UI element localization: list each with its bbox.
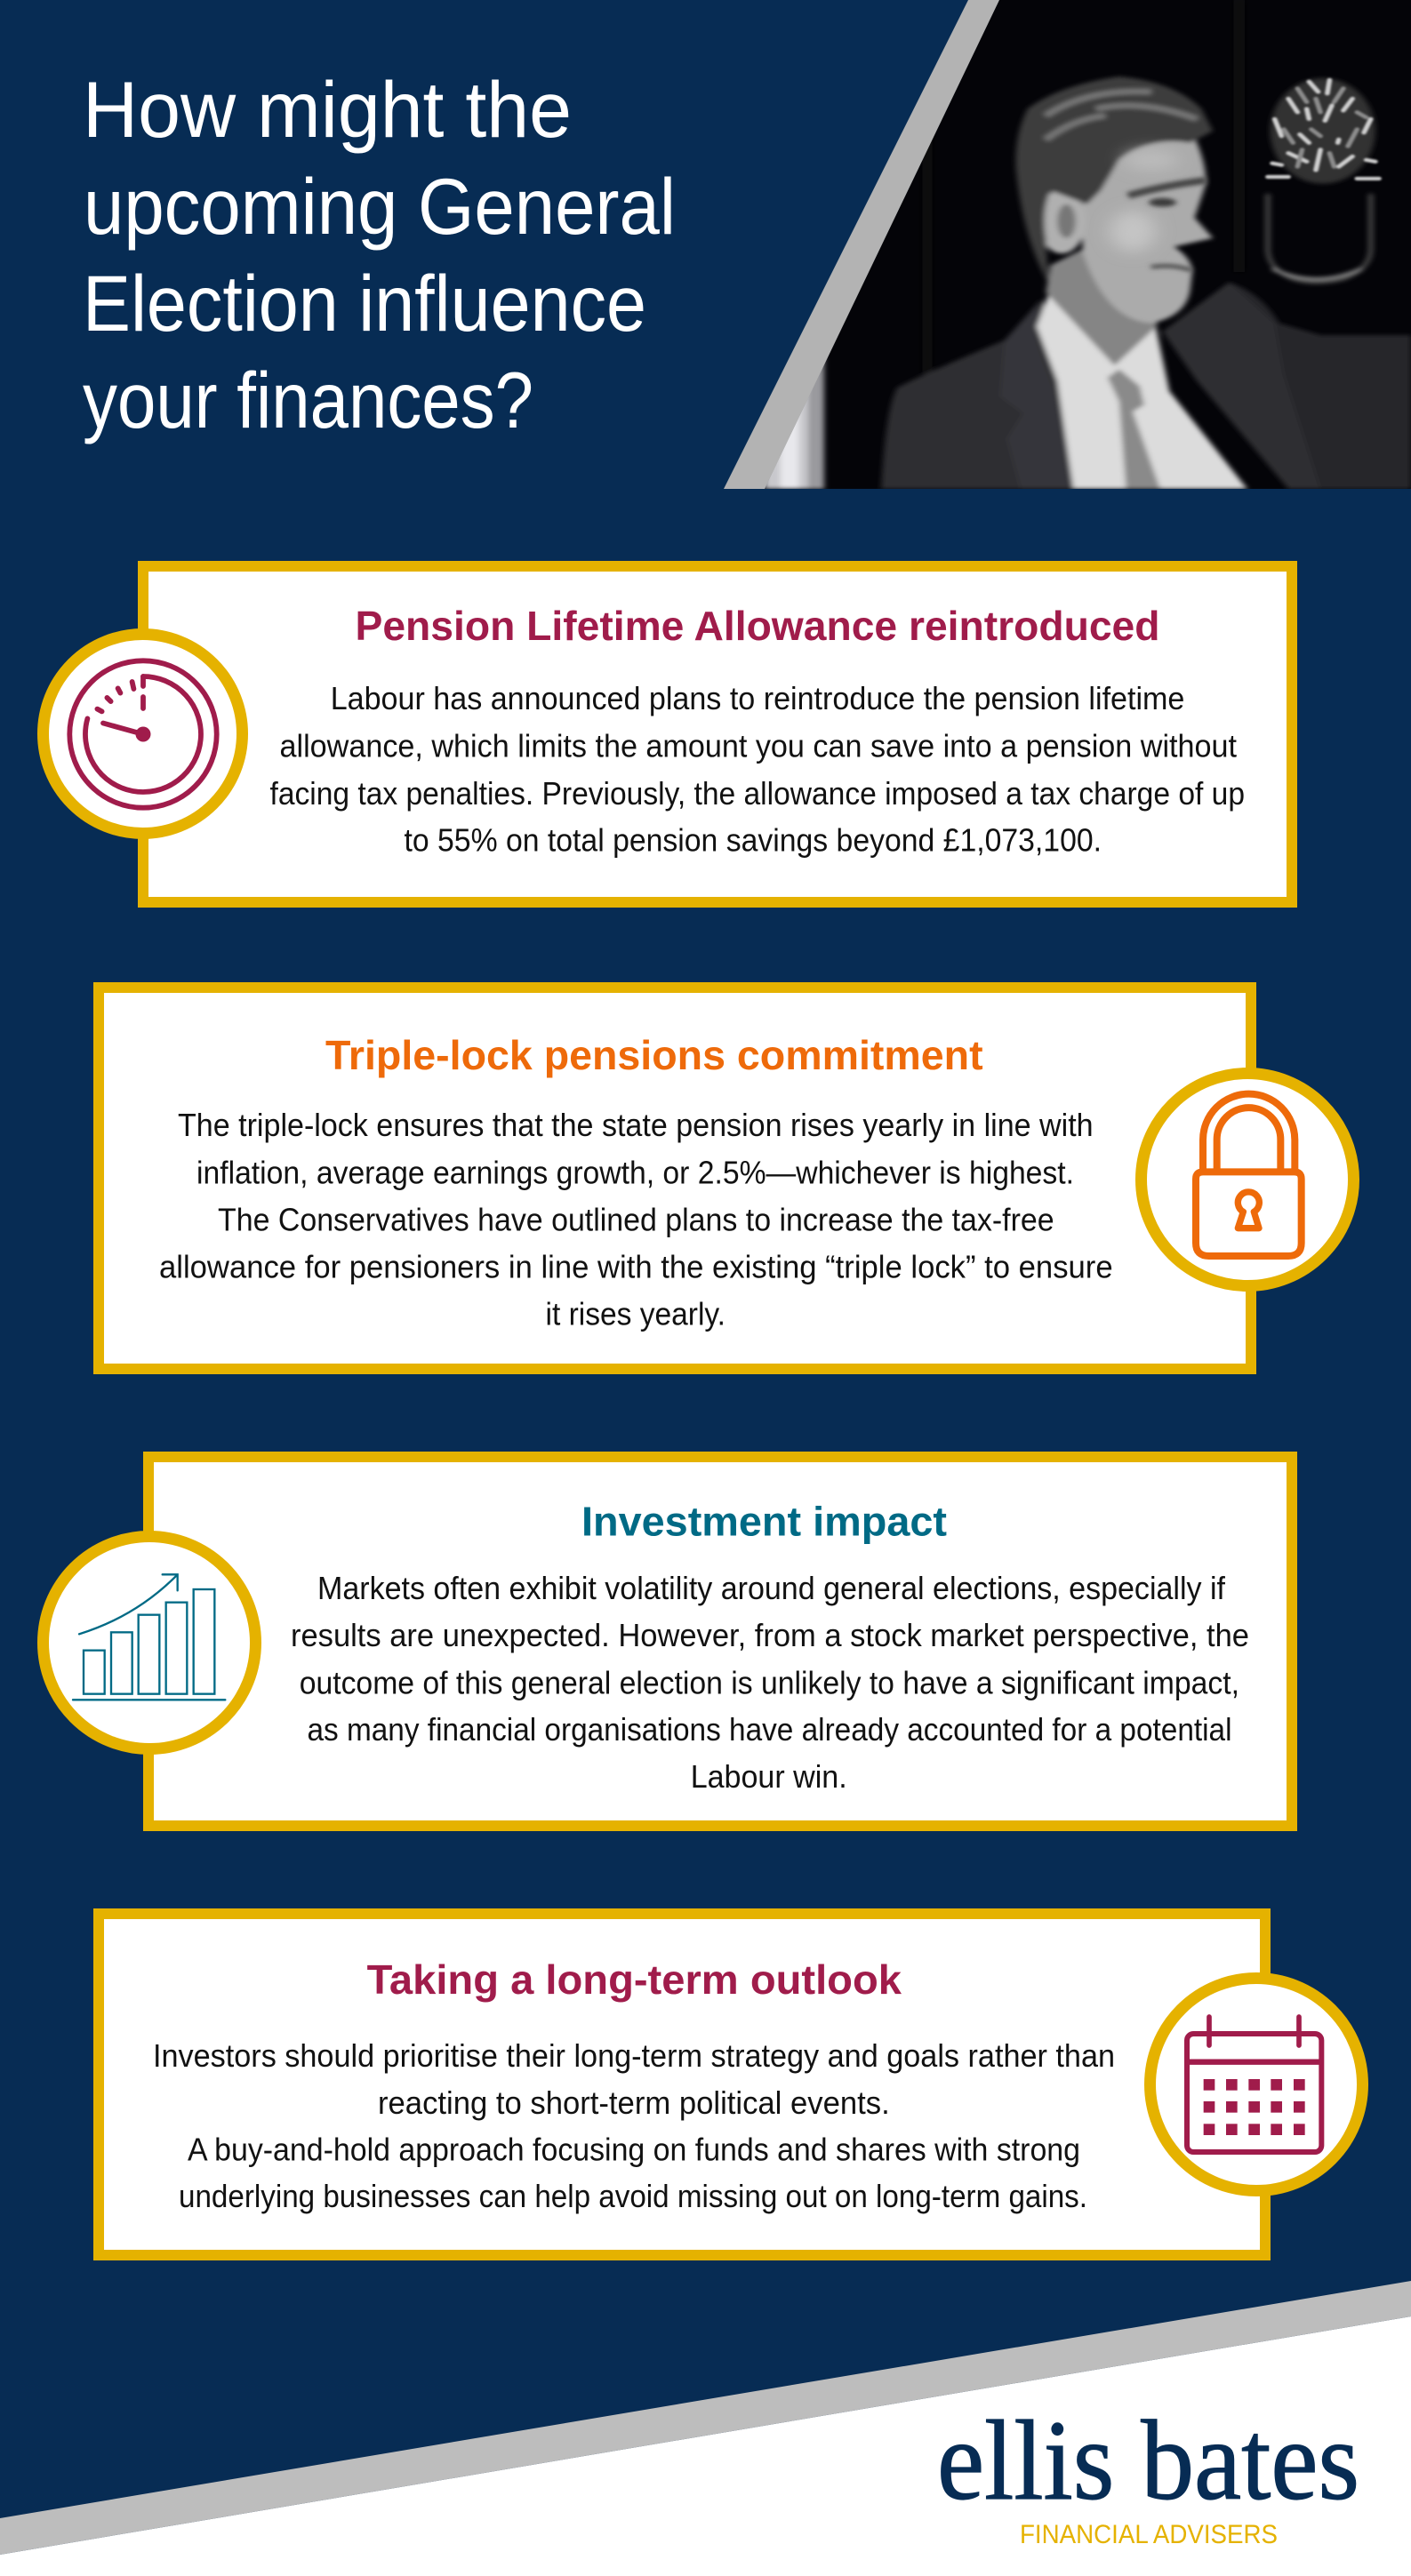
body text: as many financial organisations have already accounted for a potential — [308, 1711, 1232, 1748]
heading: Investment impact — [581, 1499, 947, 1545]
title: your finances? — [83, 356, 533, 444]
title: How might the — [83, 65, 572, 154]
body text: The triple-lock ensures that the state pension rises yearly in line with — [178, 1107, 1094, 1143]
title — [83, 65, 676, 444]
icon: calendar — [1150, 1979, 1362, 2190]
body text: it rises yearly. — [546, 1296, 726, 1332]
body text: A buy-and-hold approach focusing on funds and shares with strong — [188, 2132, 1080, 2167]
card frame — [148, 1457, 1292, 1826]
logo: ellis bates — [937, 2397, 1359, 2524]
panel: investment impact — [43, 1457, 1292, 1826]
footer grey diagonal band — [0, 2281, 1411, 2555]
body text: allowance for pensioners in line with the existing “triple lock” to ensure — [159, 1248, 1113, 1285]
panel: triple-lock pensions — [99, 988, 1353, 1369]
icon: rising bar chart — [43, 1536, 256, 1749]
body text: outcome of this general election is unlikely to have a significant impact, — [300, 1664, 1239, 1701]
body text: Investors should prioritise their long-term strategy and goals rather than — [153, 2037, 1115, 2074]
body text: inflation, average earnings growth, or 2.5%—whichever is highest. — [196, 1154, 1074, 1191]
body text — [153, 2037, 1115, 2214]
icon: gauge — [43, 635, 242, 834]
body text: Markets often exhibit volatility around general elections, especially if — [317, 1570, 1226, 1606]
card frame — [99, 1914, 1265, 2255]
body text — [159, 1107, 1113, 1332]
grey diagonal band beside photo — [724, 0, 999, 489]
body text: underlying businesses can help avoid missing out on long-term gains. — [179, 2178, 1087, 2214]
title: Election influence — [83, 259, 646, 348]
body text — [270, 680, 1245, 859]
body text: facing tax penalties. Previously, the allowance imposed a tax charge of up — [270, 775, 1245, 812]
photo: man at a black door — [739, 0, 1411, 489]
card frame — [99, 988, 1251, 1369]
heading: Pension Lifetime Allowance reintroduced — [356, 603, 1159, 649]
body text: The Conservatives have outlined plans to increase the tax-free — [218, 1202, 1054, 1237]
body text: allowance, which limits the amount you can save into a pension without — [279, 727, 1237, 764]
body text: to 55% on total pension savings beyond £1,073,100. — [404, 821, 1102, 859]
body text — [291, 1570, 1249, 1795]
card frame — [143, 566, 1292, 902]
heading: Triple-lock pensions commitment — [325, 1032, 983, 1078]
panel: long-term outlook — [99, 1914, 1362, 2255]
lion knocker highlights — [1268, 80, 1379, 179]
logo: FINANCIAL ADVISERS — [1020, 2520, 1278, 2549]
body text: Labour has announced plans to reintroduce the pension lifetime — [331, 680, 1184, 716]
icon: padlock — [1142, 1074, 1353, 1285]
body text: reacting to short-term political events. — [378, 2084, 890, 2121]
title: upcoming General — [84, 162, 676, 251]
heading: Taking a long-term outlook — [367, 1956, 902, 2003]
body text: Labour win. — [691, 1758, 847, 1795]
body text: results are unexpected. However, from a stock market perspective, the — [291, 1617, 1249, 1653]
footer white area — [0, 2316, 1411, 2576]
panel: pension lifetime allowance — [43, 566, 1292, 902]
